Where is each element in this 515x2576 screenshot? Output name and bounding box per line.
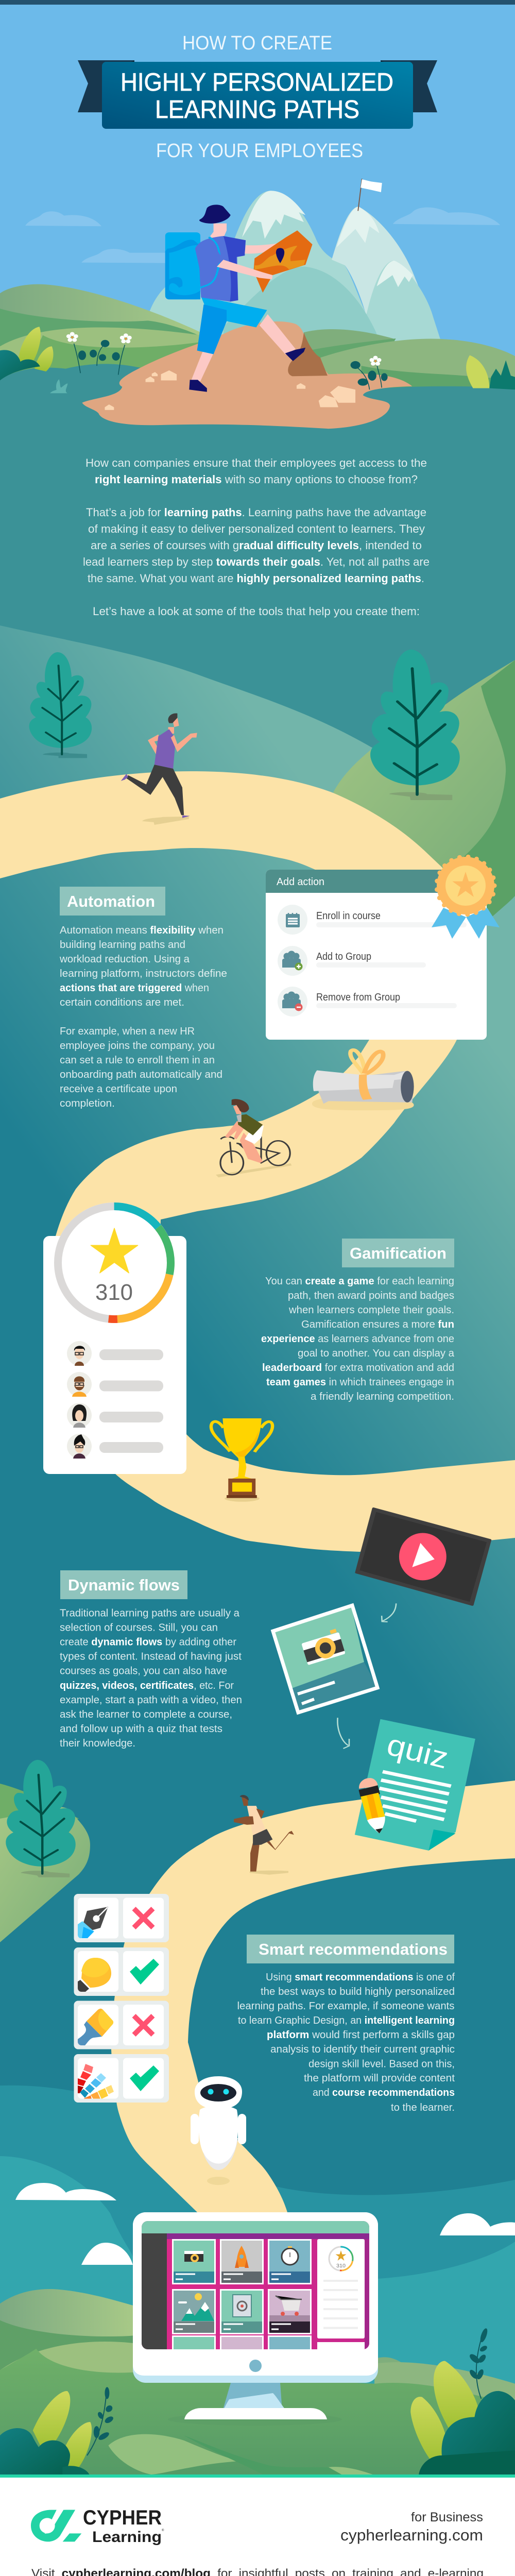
intro text: of making it easy to deliver personalized content to learners. They <box>88 522 425 535</box>
course tile: landscape <box>172 2289 216 2334</box>
monitor screen <box>142 2221 369 2349</box>
intro text: That’s a job for learning paths. Learning paths have the advantage <box>86 506 426 519</box>
dynamic flows text: example, start a path with a video, then <box>60 1694 242 1706</box>
dynamic flows text: types of content. Instead of having just <box>60 1651 242 1662</box>
panel: dynamic flows <box>60 1570 242 1749</box>
gamification text: Gamification ensures a more fun <box>301 1319 454 1330</box>
row: enroll in course: Enroll in course <box>316 910 381 922</box>
heading: dynamic flows: Dynamic flows <box>68 1576 180 1594</box>
intro text: right learning materials with so many options to choose from? <box>95 473 418 486</box>
right plant <box>410 2328 515 2475</box>
footer <box>0 2475 515 2576</box>
course tile: stopwatch <box>268 2239 312 2284</box>
automation text: completion. <box>60 1098 115 1109</box>
automation text: receive a certificate upon <box>60 1083 177 1095</box>
green base <box>0 2349 515 2475</box>
gamification text: experience as learners advance from one <box>261 1333 454 1345</box>
automation text: workload reduction. Using a <box>59 954 190 965</box>
main title: HIGHLY PERSONALIZED <box>121 69 393 96</box>
panel: gamification <box>261 1239 455 1402</box>
panel: add action card <box>266 870 487 1040</box>
intro text: lead learners step by step towards their goals. Yet, not all paths are <box>83 555 430 568</box>
smart recommendations text: the platform will provide content <box>304 2073 455 2084</box>
main title: LEARNING PATHS <box>155 96 359 124</box>
ribbon tails <box>78 60 437 113</box>
scene: hero hills, mountains and ground <box>0 179 515 438</box>
background lower: teal <box>0 1855 515 2215</box>
smart recommendations text: to learn Graphic Design, an intelligent learning <box>238 2015 455 2026</box>
quiz label: quiz <box>384 1728 452 1775</box>
score: 310 <box>95 1280 133 1305</box>
rock <box>288 332 328 376</box>
heading: smart recommendations <box>247 1935 454 1963</box>
icon: photo card <box>273 1605 377 1713</box>
side panel <box>317 2239 365 2349</box>
path mound <box>82 321 412 429</box>
logo: ® <box>162 2529 164 2532</box>
arrow: photo to quiz <box>337 1718 349 1749</box>
runner: quiz path <box>234 1795 294 1875</box>
dynamic flows text: and follow up with a quiz that tests <box>60 1723 222 1735</box>
mountains <box>145 191 441 363</box>
gamification text: path, then award points and badges <box>288 1290 454 1301</box>
smart recommendations text: platform would first perform a skills gap <box>267 2029 455 2041</box>
clouds: bottom <box>15 2183 515 2265</box>
dynamic flows text: their knowledge. <box>60 1738 135 1749</box>
dynamic flows text: quizzes, videos, certificates, etc. For <box>60 1680 234 1691</box>
leaderboard row 3 <box>67 1403 163 1428</box>
big gradient hill <box>0 625 515 1906</box>
scene: bottom hills and plants <box>0 2289 515 2475</box>
icon: robot <box>191 2076 246 2185</box>
left hills <box>0 2289 138 2387</box>
gamification text: a friendly learning competition. <box>311 1391 454 1402</box>
intro text: the same. What you want are highly personalized learning paths. <box>88 572 424 585</box>
side panel: 310 <box>336 2263 346 2269</box>
dynamic flows text: selection of courses. Still, you can <box>60 1622 218 1633</box>
heading: gamification: Gamification <box>350 1244 447 1262</box>
gamification text: goal to another. You can display a <box>298 1348 455 1359</box>
row: remove from group: Remove from Group <box>316 992 400 1003</box>
leaderboard row 2 <box>67 1372 163 1397</box>
automation text: onboarding path automatically and <box>60 1069 222 1080</box>
course tile: rocket <box>220 2239 264 2284</box>
gamification text: when learners complete their goals. <box>288 1304 454 1316</box>
title line 3: FOR YOUR EMPLOYEES <box>156 140 363 162</box>
panel: smart recommendations <box>237 1935 455 2113</box>
automation text: learning platform, instructors define <box>60 968 227 979</box>
dynamic flows text: create dynamic flows by adding other <box>60 1636 236 1648</box>
heading: automation <box>60 887 165 916</box>
automation text: can set a rule to enroll them in an <box>60 1055 215 1066</box>
automation text: certain conditions are met. <box>60 997 184 1008</box>
tree: left <box>29 652 92 758</box>
section 3 illustrations <box>216 1050 414 1177</box>
panel: add action card: Add action <box>277 876 324 888</box>
smart recommendations text: Using smart recommendations is one of <box>266 1972 455 1983</box>
smart recommendations text: to the learner. <box>391 2102 455 2113</box>
ground <box>0 364 515 438</box>
pebbles <box>105 370 355 410</box>
logo mark <box>31 2509 81 2541</box>
left hills <box>0 284 203 391</box>
course tiles: partial row <box>172 2335 312 2349</box>
right hills <box>374 2357 515 2420</box>
intro text: Let’s have a look at some of the tools that help you create them: <box>93 605 420 618</box>
dynamic flows text: ask the learner to complete a course, <box>60 1709 232 1720</box>
heading: smart recommendations: Smart recommendations <box>259 1940 448 1958</box>
tree: bottom left <box>6 1760 76 1877</box>
icon: trophy <box>211 1418 272 1502</box>
winding path <box>0 771 515 1552</box>
automation text: For example, when a new HR <box>60 1026 195 1037</box>
flowers <box>66 332 388 389</box>
heading: dynamic flows <box>60 1570 187 1599</box>
dynamic flows text <box>60 1607 242 1749</box>
automation text: building learning paths and <box>60 939 185 951</box>
right green hill <box>333 660 515 922</box>
smart recommendations text: and course recommendations <box>313 2087 455 2098</box>
section 4 illustrations <box>211 1418 490 1622</box>
heading: automation: Automation <box>67 892 155 910</box>
row: light bulb <box>74 1947 169 1996</box>
course tile: cart <box>268 2289 312 2334</box>
logo: CYPHER <box>83 2506 162 2529</box>
path section: winding path lower <box>111 1781 515 2212</box>
title block <box>78 32 437 162</box>
tree: right <box>370 650 460 800</box>
dynamic flows text: courses as goals, you can also have <box>60 1665 227 1676</box>
gamification text: team games in which trainees engage in <box>266 1377 454 1388</box>
row: add to group: Add to Group <box>316 951 371 962</box>
icon: star <box>91 1228 138 1273</box>
card header <box>266 870 487 893</box>
left green hill <box>0 1784 90 1942</box>
intro text <box>83 456 430 618</box>
mountain flag <box>358 179 382 211</box>
leaderboard row 1 <box>67 1341 163 1366</box>
row: colour palette <box>74 2054 169 2103</box>
icon: pencil <box>358 1778 385 1834</box>
smart recommendations text <box>237 1972 455 2113</box>
clouds <box>25 208 500 263</box>
automation text: actions that are triggered when <box>60 982 209 994</box>
gamification text <box>261 1276 455 1402</box>
left plant <box>0 2387 114 2475</box>
right hills <box>304 329 515 391</box>
icon: medal badge <box>432 857 500 939</box>
grass tuft <box>50 379 67 393</box>
row: paint brush <box>74 2001 169 2049</box>
gamification text: You can create a game for each learning <box>265 1276 454 1287</box>
automation text <box>59 925 227 1109</box>
icon: quiz sheet <box>355 1719 475 1851</box>
heading: gamification <box>342 1239 454 1267</box>
footer accent line <box>0 2475 515 2478</box>
smart recommendations text: learning paths. For example, if someone wants <box>237 2001 454 2012</box>
course tile: camera <box>172 2239 216 2284</box>
panel: automation <box>59 887 227 1109</box>
left plant <box>0 327 54 380</box>
panel: leaderboard card <box>43 1202 186 1474</box>
main title <box>121 69 393 124</box>
background: sky <box>0 0 515 412</box>
background: teal field <box>0 384 515 878</box>
panel: choice cards <box>74 1894 169 2103</box>
automation text: employee joins the company, you <box>60 1040 215 1052</box>
automation text: Automation means flexibility when <box>60 925 224 936</box>
smart recommendations text: design skill level. Based on this, <box>308 2059 455 2070</box>
gamification text: leaderboard for extra motivation and add <box>262 1362 454 1374</box>
row: pen <box>74 1894 169 1942</box>
intro text: are a series of courses with gradual difficulty levels, intended to <box>91 539 422 552</box>
monitor body <box>133 2212 378 2383</box>
title line 1: HOW TO CREATE <box>182 32 332 54</box>
cyclist <box>216 1099 291 1177</box>
row: add to group <box>278 946 426 976</box>
intro text: How can companies ensure that their employees get access to the <box>85 456 427 469</box>
footer right text <box>340 2510 483 2544</box>
runner <box>121 714 197 825</box>
arrow: video to photo <box>382 1603 396 1622</box>
progress ring <box>54 1202 175 1323</box>
footer right text: for Business <box>411 2510 483 2524</box>
right plant <box>466 355 515 389</box>
title banner <box>102 62 413 129</box>
foreground waves <box>108 2434 373 2475</box>
logo: Learning <box>92 2529 162 2546</box>
monitor stand <box>168 2383 342 2426</box>
top bar <box>0 0 515 5</box>
smart recommendations text: analysis to identify their current graphic <box>270 2044 455 2055</box>
leaderboard row 4 <box>67 1434 163 1459</box>
camera <box>300 1628 346 1665</box>
dynamic flows text: Traditional learning paths are usually a <box>60 1607 240 1619</box>
monitor <box>133 2212 378 2426</box>
row: enroll in course <box>278 905 467 935</box>
icon: certificate scroll <box>312 1050 414 1110</box>
hiker with backpack and map <box>165 205 313 392</box>
background: bottom waves <box>0 2086 515 2421</box>
smart recommendations text: the best ways to build highly personalized <box>261 1986 455 1997</box>
course tile: gear <box>220 2289 264 2334</box>
section 2 illustrations <box>29 650 460 825</box>
footer right text: cypherlearning.com <box>340 2526 483 2544</box>
row: remove from group <box>278 987 457 1016</box>
icon: video player <box>356 1509 490 1605</box>
logo <box>31 2506 164 2546</box>
